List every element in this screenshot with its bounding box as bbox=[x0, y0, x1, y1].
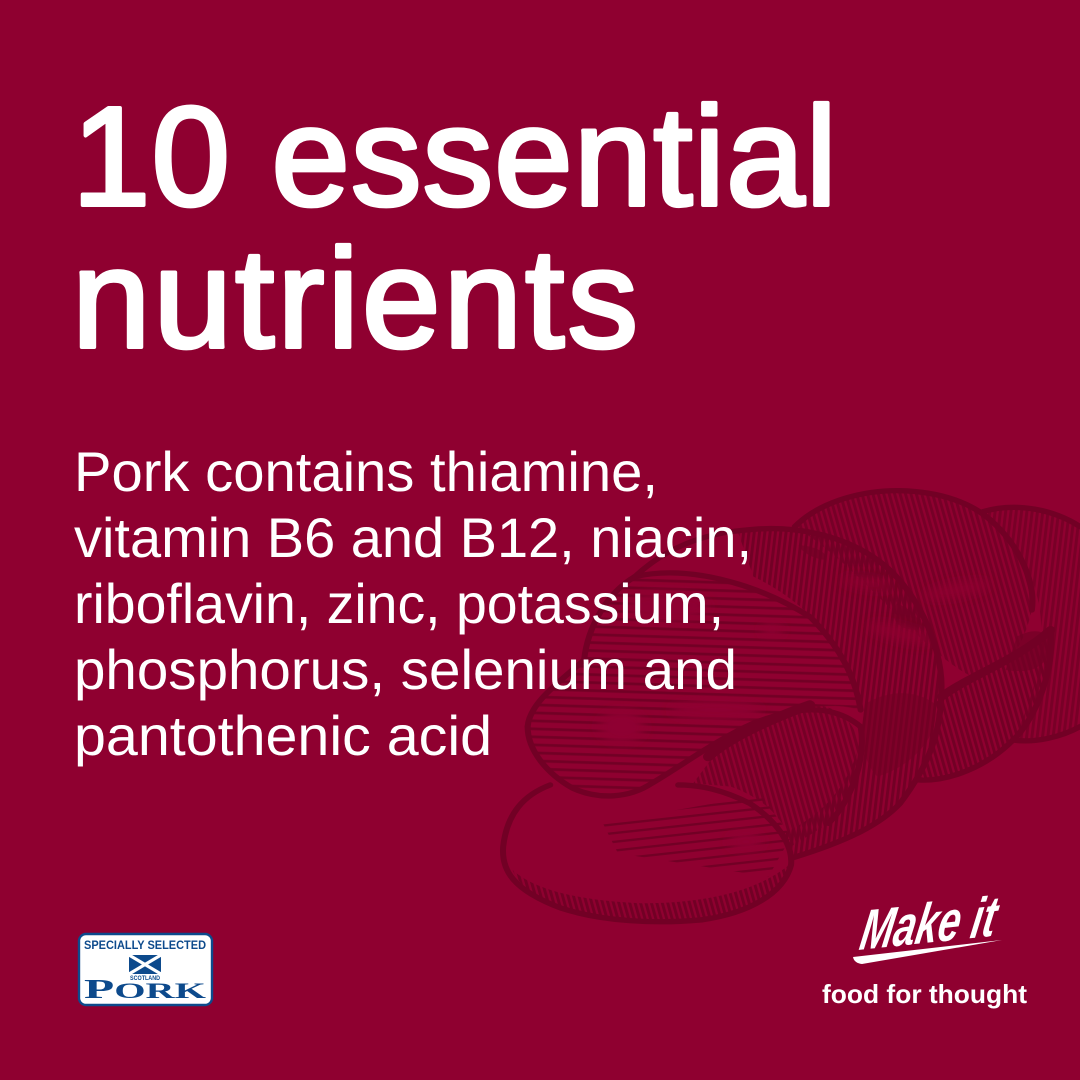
script wordmark: Make it bbox=[856, 884, 1004, 963]
illustration: sliced pork joint bbox=[503, 491, 1080, 922]
underline swoosh bbox=[853, 940, 1002, 964]
lighter highlight bands on the body bbox=[839, 573, 991, 648]
title bbox=[72, 77, 837, 377]
body text bbox=[74, 440, 752, 767]
logo text: scotland: SCOTLAND bbox=[130, 976, 161, 982]
tagline: food for thought bbox=[822, 979, 1027, 1009]
joint outlines bbox=[528, 491, 1080, 858]
icon: saltire flag bbox=[129, 955, 161, 974]
logo: Make it food for thought bbox=[822, 884, 1027, 1009]
cut face of the joint bbox=[528, 573, 861, 796]
rear lobe hatching bbox=[693, 491, 1080, 858]
logo text: specially selected: SPECIALLY SELECTED bbox=[84, 940, 206, 952]
shadow masses bbox=[799, 545, 1051, 777]
body text: pantothenic acid bbox=[74, 704, 492, 767]
logo badge bbox=[79, 934, 212, 1005]
title: 10 essential bbox=[72, 77, 837, 235]
body text: Pork contains thiamine, bbox=[74, 440, 658, 503]
body text: vitamin B6 and B12, niacin, bbox=[74, 506, 752, 569]
body text: phosphorus, selenium and bbox=[74, 638, 737, 701]
face hatching bbox=[528, 573, 861, 796]
logo text: pork: P ORK bbox=[84, 974, 206, 1004]
body text: riboflavin, zinc, potassium, bbox=[74, 572, 724, 635]
bottom slice bbox=[503, 785, 791, 922]
title: nutrients bbox=[72, 219, 638, 377]
logo: Specially Selected Scotland Pork bbox=[79, 934, 212, 1005]
face highlights bbox=[599, 592, 784, 743]
